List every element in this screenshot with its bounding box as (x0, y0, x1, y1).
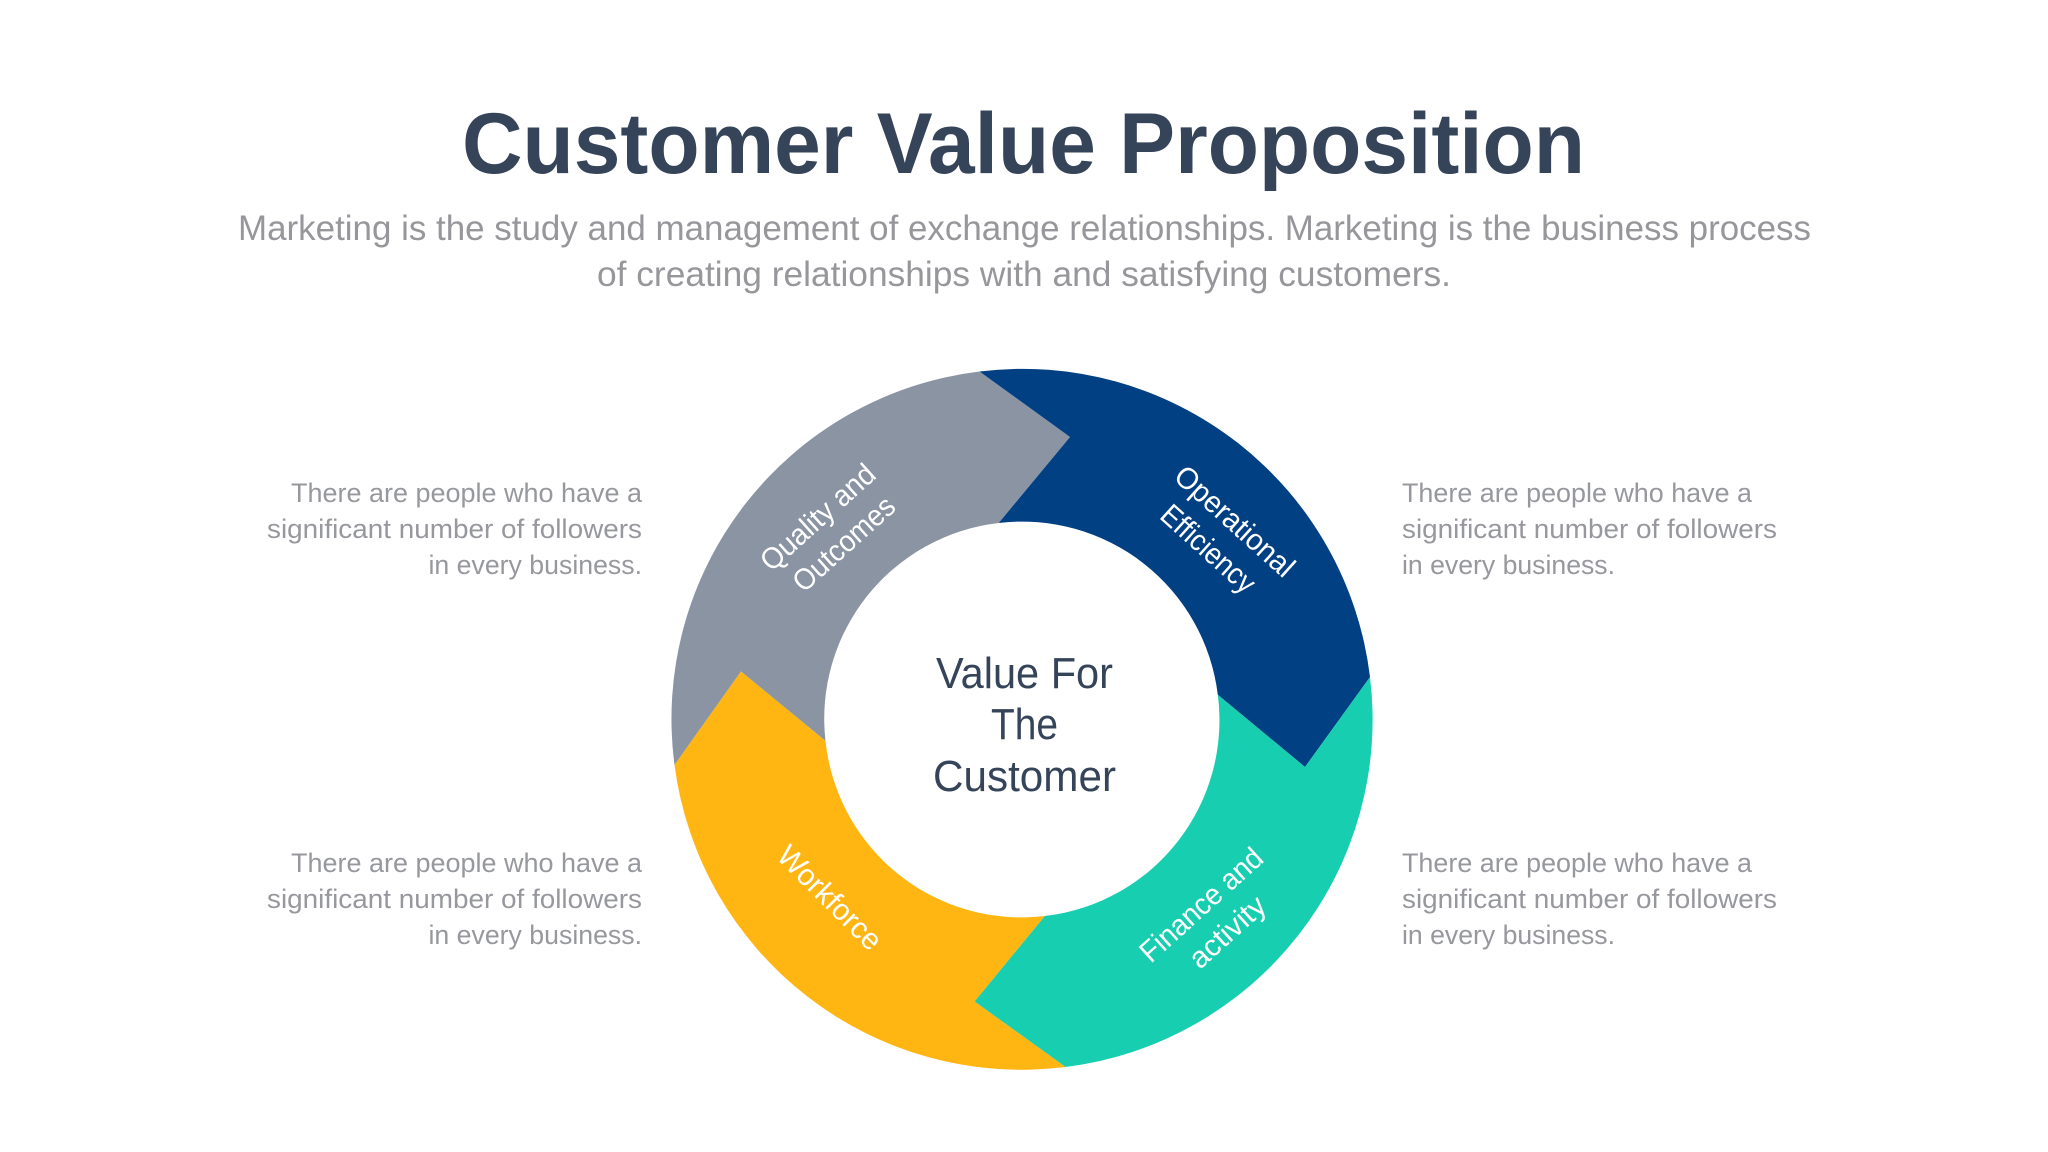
text block: bottom left: in every business. (428, 920, 642, 950)
text block: bottom right: significant number of followers (1402, 884, 1777, 914)
cycle diagram (671, 369, 1373, 1070)
segment: workforce: Workforce (770, 839, 888, 957)
text block: bottom right (1402, 848, 1777, 950)
segment: workforce (674, 672, 1066, 1070)
subtitle text: Marketing is the study and management of exchange relationships. Marketing is the business process (238, 209, 1811, 248)
subtitle text (238, 209, 1811, 294)
segment: finance and activity: activity (1182, 889, 1273, 975)
segment: operational efficiency: Operational (1168, 459, 1301, 584)
text block: bottom right: There are people who have a (1402, 848, 1753, 878)
segment: finance and activity: Finance and (1133, 841, 1270, 969)
text block: bottom left (267, 848, 643, 950)
center label (933, 649, 1116, 801)
segment: operational efficiency: Efficiency (1154, 498, 1262, 600)
segment: quality and outcomes (671, 372, 1070, 765)
segment: operational efficiency (980, 369, 1370, 767)
segment: quality and outcomes: Quality and (754, 458, 882, 578)
subtitle text: of creating relationships with and satisfying customers. (597, 255, 1451, 294)
segment: finance and activity (974, 677, 1373, 1067)
text block: top right: There are people who have a (1402, 478, 1753, 508)
text block: top right: in every business. (1402, 550, 1615, 580)
center label: Value For (936, 649, 1113, 698)
center label: The (991, 700, 1058, 749)
text block: bottom left: There are people who have a (291, 848, 643, 878)
text block: bottom left: significant number of followers (267, 884, 642, 914)
segment: quality and outcomes: Outcomes (786, 490, 902, 599)
center label: Customer (933, 752, 1116, 801)
title: Customer Value Proposition (462, 96, 1585, 192)
text block: top left: significant number of followers (267, 514, 642, 544)
text block: top right: significant number of followers (1402, 514, 1777, 544)
text block: top left (267, 478, 643, 580)
text block: top left: There are people who have a (291, 478, 643, 508)
text block: top right (1402, 478, 1777, 580)
text block: top left: in every business. (428, 550, 642, 580)
text block: bottom right: in every business. (1402, 920, 1615, 950)
